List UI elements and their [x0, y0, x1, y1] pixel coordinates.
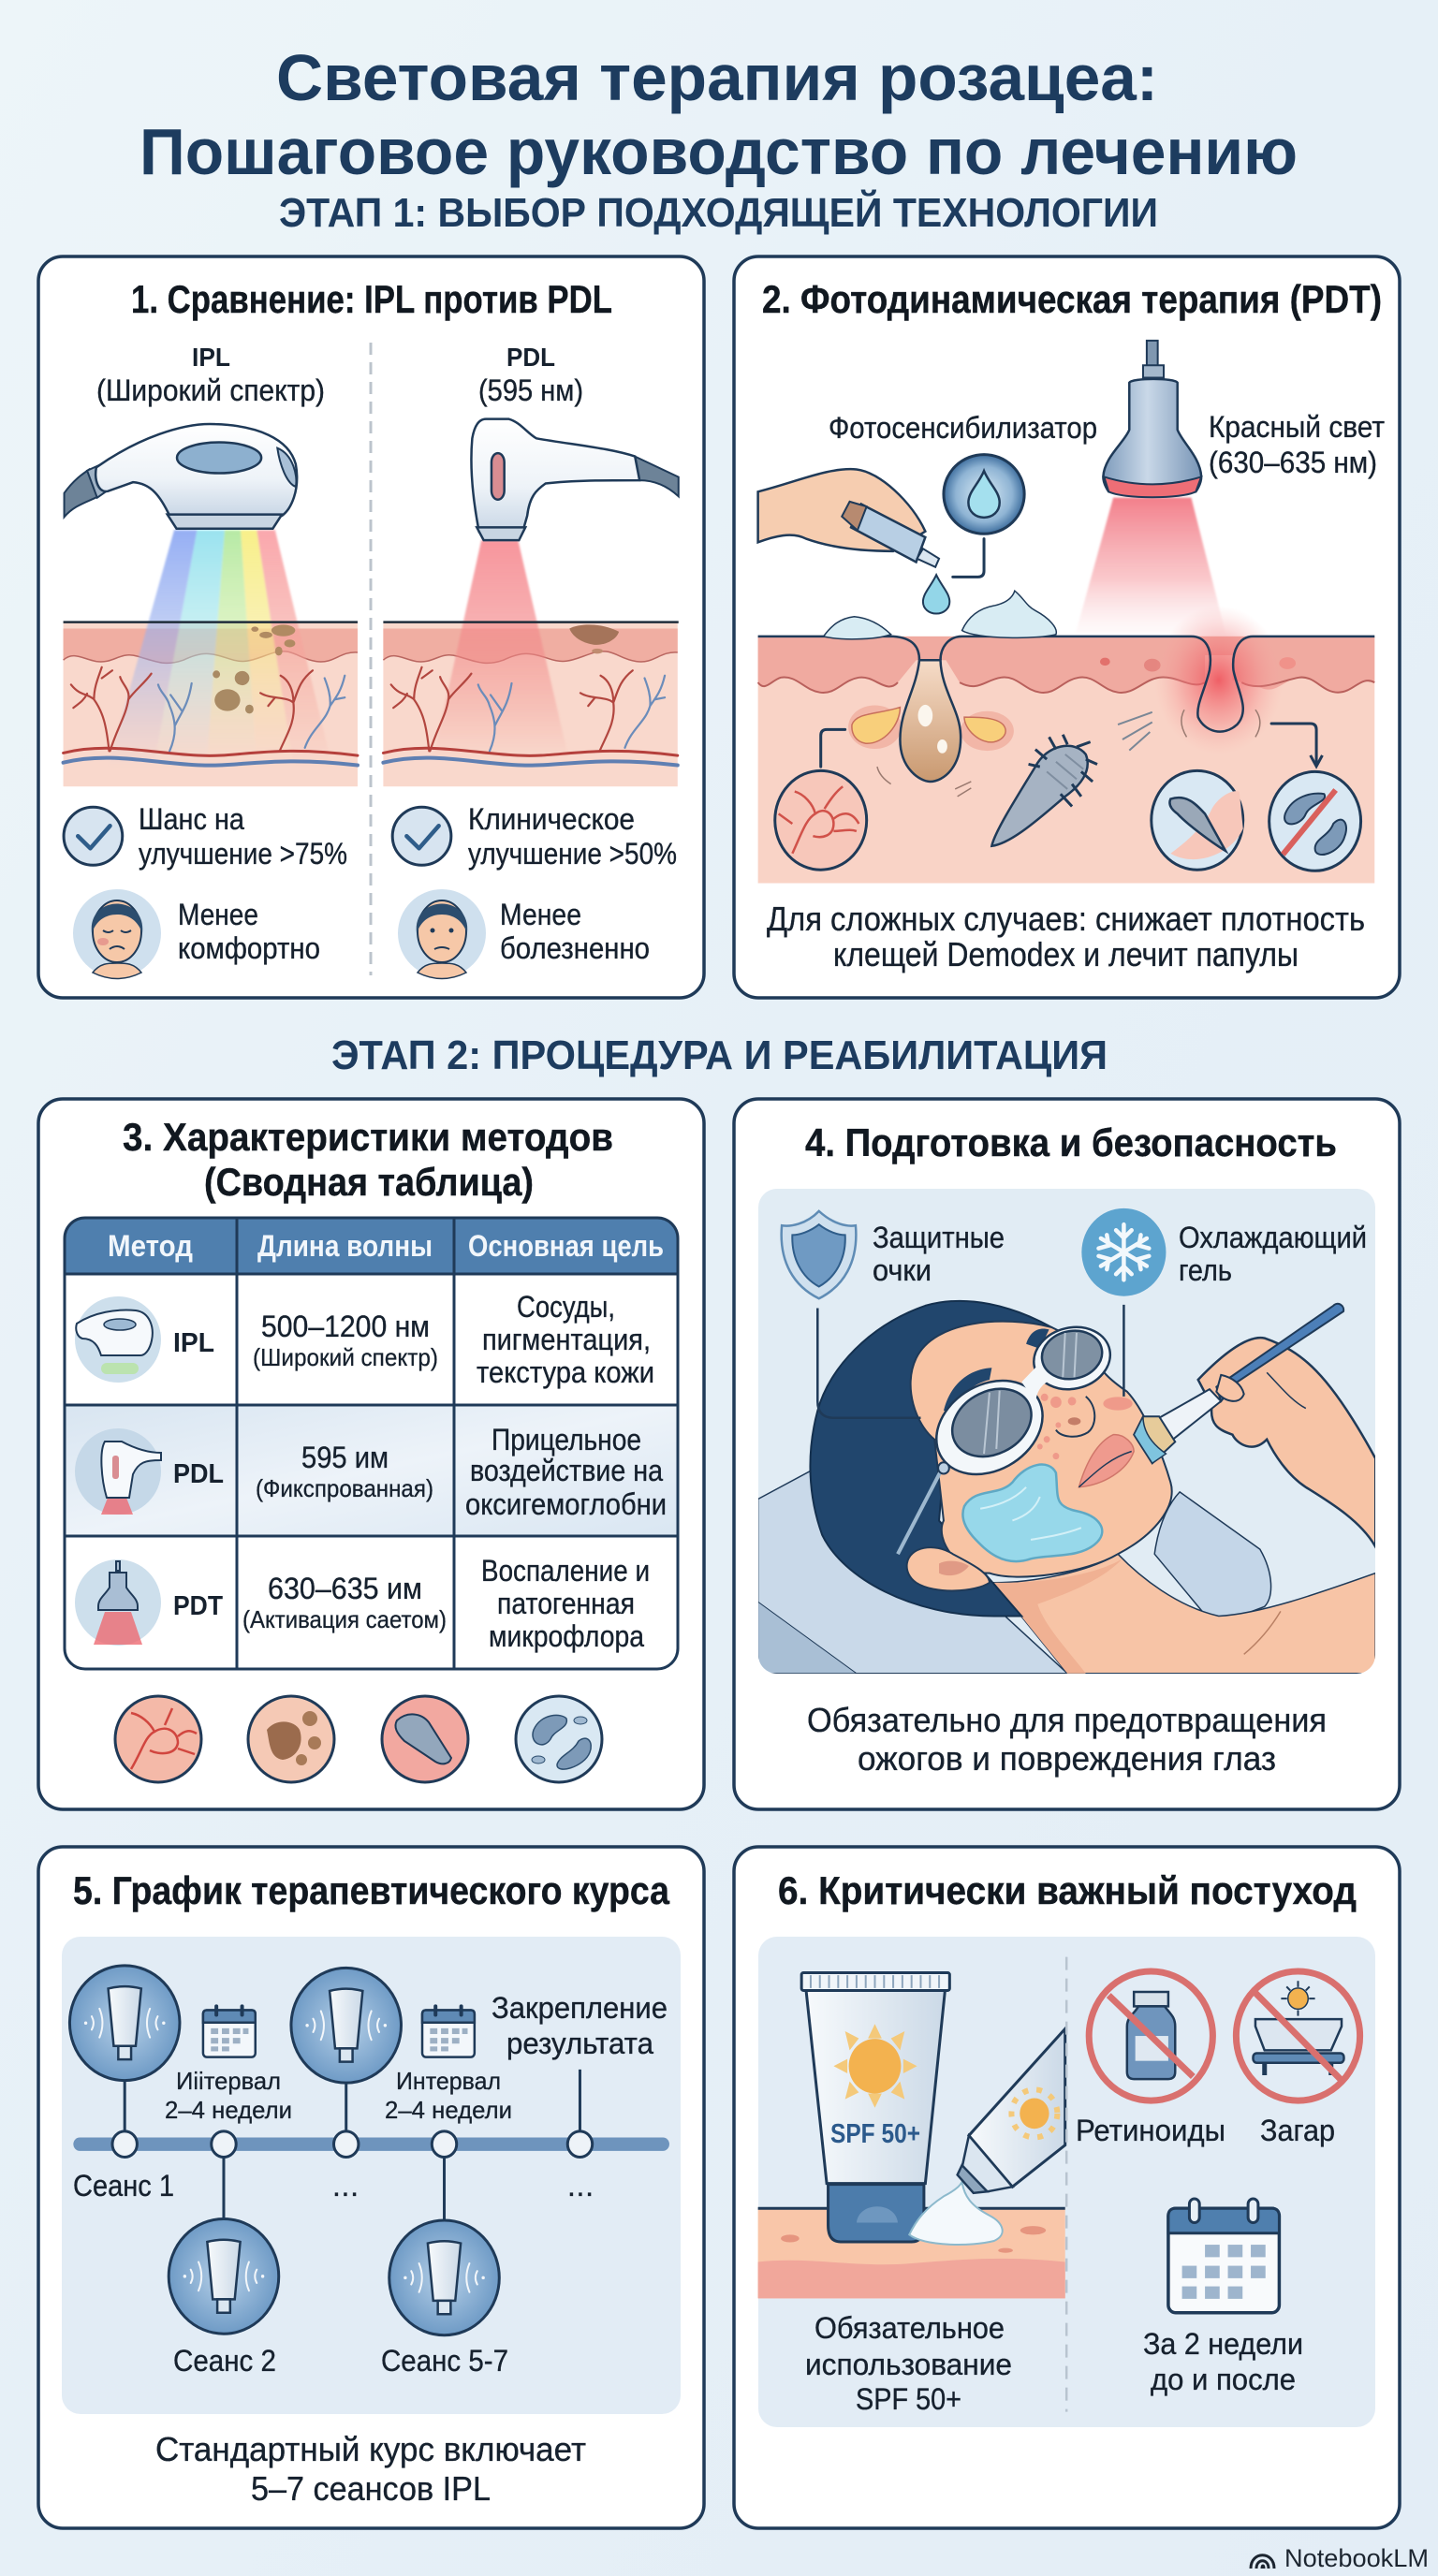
timeline chart [62, 1937, 681, 2414]
panel 6 heading: 6. Критически важный постуход [778, 1868, 1357, 1912]
IPL label: IPL [192, 343, 230, 372]
label: interval 2: 2–4 недели [385, 2096, 512, 2124]
panel 5 heading: 5. График терапевтического курса [73, 1868, 670, 1912]
caption: 5–7 сеансов IPL [251, 2469, 491, 2508]
text: less comfortable: Менее [178, 898, 258, 931]
label: cooling gel: гель [1179, 1253, 1232, 1287]
caption [767, 900, 1365, 973]
IPL label [96, 343, 325, 407]
skin cross-section [758, 637, 1374, 884]
SPF tube [801, 1973, 949, 2242]
hand with applicator [758, 469, 939, 567]
session labels: Сеанс 2 [173, 2344, 276, 2378]
row PDL: оксигемоглобни [465, 1487, 667, 1521]
icon: calendar [1168, 2199, 1279, 2313]
hair [810, 1301, 1051, 1617]
title: Световая терапия розацеа: [276, 41, 1158, 114]
brow [944, 1329, 1049, 1411]
heading: stage 2: ЭТАП 2: ПРОЦЕДУРА И РЕАБИЛИТАЦИЯ [331, 1032, 1108, 1078]
PDL label: PDL [506, 343, 555, 372]
follicles [758, 637, 1374, 797]
PDL stat: Клиническое [468, 802, 635, 836]
title: Пошаговое руководство по лечению [139, 115, 1298, 188]
caption: Обязательно для предотвращения [807, 1701, 1327, 1739]
icon: vessels [115, 1696, 201, 1782]
label: interval 2 [385, 2067, 512, 2124]
label: interval 2: Интервал [396, 2067, 501, 2095]
icon: calm face [398, 889, 486, 979]
panel 4 heading: 4. Подготовка и безопасность [805, 1120, 1337, 1164]
text: two weeks [1143, 2327, 1303, 2396]
IPL handpiece [65, 424, 297, 529]
label: cooling gel [1179, 1221, 1367, 1287]
logo: NotebookLM: NotebookLM [1284, 2544, 1429, 2572]
row PDL [75, 1423, 667, 1521]
icon: no tanning [1236, 1971, 1360, 2100]
session labels [73, 2169, 594, 2378]
IPL stat: Шанс на [139, 802, 244, 836]
icon: no retinoids [1089, 1971, 1212, 2100]
IPL illustration [64, 419, 679, 865]
shoulder [994, 1554, 1375, 1674]
icon: mite [382, 1696, 468, 1782]
label: SPF on tube: SPF 50+ [830, 2119, 920, 2149]
inflamed follicle glow [1154, 606, 1283, 754]
label: goggles: Защитные [873, 1221, 1005, 1254]
session icon 5-7 [389, 2220, 499, 2335]
text: less painful [500, 898, 650, 965]
face [911, 1322, 1172, 1577]
text: mandatory SPF [805, 2311, 1012, 2416]
label: consolidation: Закрепление [492, 1991, 668, 2025]
goggles [898, 1320, 1116, 1554]
cream on skin [824, 591, 1056, 639]
row IPL: Сосуды, [517, 1290, 615, 1324]
panel 3 heading: 3. Характеристики методов [123, 1115, 613, 1159]
text: mandatory SPF: Обязательное [814, 2311, 1005, 2345]
row PDT: Воспаление и [481, 1554, 650, 1588]
row PDT: 630–635 им [268, 1572, 422, 1605]
row IPL: IPL [173, 1328, 214, 1358]
second tube [958, 2028, 1065, 2193]
panel 3: summary table [38, 1099, 704, 1809]
pillow [758, 1458, 1271, 1674]
calendar icon 1 [203, 2006, 256, 2057]
panel 4: preparation and safety [734, 1099, 1400, 1809]
text: two weeks: до и после [1151, 2363, 1296, 2396]
label: interval 1: Иiiтервал [176, 2067, 281, 2095]
circle: mite reduced [1152, 770, 1243, 870]
row PDL: (Фикспрованная) [256, 1474, 433, 1502]
row PDL: 595 им [301, 1441, 389, 1474]
table header: Длина волны [257, 1229, 433, 1263]
row PDT: микрофлора [489, 1619, 644, 1653]
table header: Метод [108, 1229, 193, 1263]
circle: bacteria crossed [1269, 771, 1361, 871]
icon: uncomfortable face [73, 889, 161, 979]
redness [1037, 1394, 1133, 1459]
hand with brush [1134, 1304, 1375, 1547]
label: tanning: Загар [1260, 2114, 1335, 2147]
text: less comfortable [178, 898, 320, 965]
icon: pigmentation [248, 1696, 334, 1782]
PDT illustration [758, 341, 1374, 884]
PDL label [478, 343, 583, 407]
label: retinoids: Ретиноиды [1076, 2114, 1225, 2147]
illustration: sunscreen [758, 1957, 1360, 2412]
IPL stat: улучшение >75% [139, 837, 347, 871]
label: interval 1: 2–4 недели [165, 2096, 292, 2124]
row PDT: PDT [173, 1591, 223, 1621]
connector lines [817, 1305, 1123, 1418]
panel 3 heading [123, 1115, 613, 1204]
panel 2: photodynamic therapy [734, 256, 1400, 998]
row PDL: Прицельное [492, 1423, 641, 1456]
caption: Стандартный курс включает [155, 2430, 586, 2468]
lamp [1103, 341, 1201, 497]
table header [108, 1229, 664, 1263]
label: cooling gel: Охлаждающий [1179, 1221, 1367, 1254]
label: consolidation [492, 1991, 668, 2060]
ear [907, 1547, 990, 1590]
skin [758, 2208, 1065, 2298]
caption: ожогов и повреждения глаз [858, 1739, 1276, 1778]
PDL stat: улучшение >50% [468, 837, 677, 871]
session labels: ... [332, 2169, 359, 2203]
text: less painful: болезненно [500, 931, 650, 965]
row PDT: патогенная [497, 1587, 635, 1620]
title [139, 41, 1298, 188]
caption: клещей Demodex и лечит папулы [833, 935, 1299, 973]
icon: bacteria [516, 1696, 602, 1782]
text: mandatory SPF: SPF 50+ [856, 2382, 961, 2416]
icon: PDT [75, 1559, 161, 1646]
row PDT [75, 1554, 650, 1653]
row PDT: (Активация сaетом) [242, 1605, 447, 1633]
text: less painful: Менее [500, 898, 581, 931]
row IPL: пигментация, [482, 1323, 651, 1356]
caption: Для сложных случаев: снижает плотность [767, 900, 1365, 938]
sun icon [833, 2024, 917, 2108]
drop [923, 575, 949, 614]
session labels: Сеанс 5-7 [381, 2344, 508, 2378]
mite [991, 735, 1097, 846]
icon: IPL [75, 1296, 161, 1383]
text: two weeks: За 2 недели [1143, 2327, 1303, 2361]
cream [909, 2182, 1003, 2245]
session icon 2 [169, 2218, 279, 2334]
text: mandatory SPF: использование [805, 2348, 1012, 2381]
row IPL: текстура кожи [477, 1355, 654, 1389]
icon: snowflake [1081, 1208, 1166, 1296]
label: red light: Красный свет [1209, 410, 1385, 444]
panel 1 heading: 1. Сравнение: IPL против PDL [131, 277, 612, 321]
PDL handpiece [471, 419, 679, 540]
session labels: ... [567, 2169, 594, 2203]
PDL illustration skin [383, 622, 678, 786]
panel 5: therapy course schedule [38, 1847, 704, 2528]
session labels: Сеанс 1 [73, 2169, 174, 2203]
row PDL: воздействие на [470, 1454, 663, 1487]
row IPL [75, 1290, 654, 1389]
heading: stage 1: ЭТАП 1: ВЫБОР ПОДХОДЯЩЕЙ ТЕХНОЛОГИИ [279, 188, 1158, 236]
table [64, 1217, 679, 1669]
label: photosensitizer: Фотосенсибилизатор [829, 411, 1097, 445]
label: interval 1 [165, 2067, 292, 2124]
text: less comfortable: комфортно [178, 931, 320, 965]
session icon 3 [291, 1968, 401, 2083]
label: goggles [873, 1221, 1005, 1287]
arrow [1271, 724, 1322, 767]
IPL stat [139, 802, 347, 871]
panel 3 heading: (Сводная таблица) [204, 1160, 534, 1204]
PDL stat [468, 802, 677, 871]
caption [155, 2430, 586, 2508]
IPL benefit icon: check [64, 807, 123, 865]
circle: vessels [775, 770, 867, 870]
icon: PDL [75, 1428, 161, 1515]
row IPL: (Широкий спектр) [253, 1343, 438, 1371]
icon: photosensitizer drop [944, 455, 1024, 534]
calendar icon 2 [422, 2006, 475, 2057]
panel 1: IPL vs PDL [38, 256, 704, 998]
label: goggles: очки [873, 1253, 932, 1287]
icon: shield [782, 1211, 856, 1298]
row IPL: 500–1200 нм [261, 1310, 430, 1343]
gel patch [962, 1465, 1102, 1561]
table header: Основная цель [468, 1229, 664, 1263]
label: consolidation: результата [506, 2027, 653, 2060]
sebaceous glands [848, 705, 1014, 751]
label: red light [1209, 410, 1385, 479]
row PDL: PDL [173, 1459, 224, 1489]
nose [1056, 1397, 1094, 1437]
PDL label: (595 нм) [478, 373, 583, 407]
PDL benefit icon: check [392, 807, 451, 865]
illustration: patient face [758, 1189, 1375, 1674]
label: red light: (630–635 нм) [1209, 446, 1377, 479]
lips [1078, 1435, 1134, 1487]
caption [807, 1701, 1327, 1778]
panel 6: critical aftercare [734, 1847, 1400, 2528]
IPL label: (Широкий спектр) [96, 373, 325, 407]
beam of red light [1076, 498, 1225, 633]
session icon 1 [69, 1966, 180, 2081]
